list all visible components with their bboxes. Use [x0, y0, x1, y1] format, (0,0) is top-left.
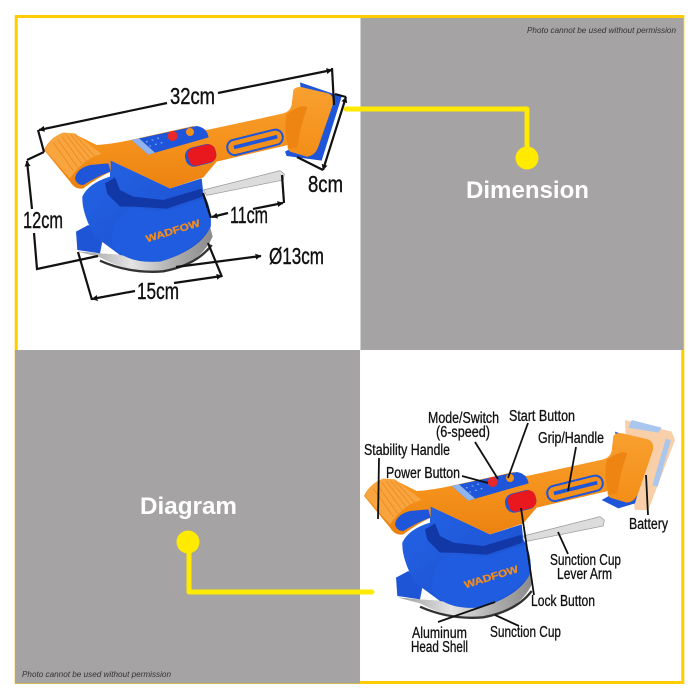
dimension: 8cm — [297, 94, 346, 197]
dimension: 32cm: 32cm — [170, 83, 215, 109]
body shaded detail — [425, 523, 523, 555]
label: Start Button — [508, 408, 575, 478]
heading: Diagram: Diagram — [140, 493, 237, 520]
handle slot — [546, 474, 604, 503]
body lobe — [432, 544, 531, 608]
label: Sunction Cup — [490, 615, 561, 641]
foot — [396, 571, 423, 599]
orange housing — [364, 433, 653, 535]
neck shading — [285, 106, 307, 149]
dimension: 11cm: 11cm — [230, 202, 268, 228]
dimension: 13cm diameter — [176, 243, 324, 269]
label: Sunction Cup Lever Arm: Sunction Cup — [550, 552, 621, 569]
panel light strip — [132, 138, 155, 155]
label: Aluminum Head Shell: Head Shell — [411, 639, 468, 656]
label: Battery — [629, 475, 668, 533]
dimension: 32cm — [38, 68, 334, 152]
label: Lock Button — [521, 508, 595, 610]
label: Power Button: Power Button — [386, 465, 460, 482]
start button — [506, 474, 514, 482]
lever arm — [203, 171, 284, 195]
label: Sunction Cup Lever Arm — [550, 532, 621, 583]
label: Mode/Switch — [428, 410, 499, 479]
dimension: 15cm — [78, 243, 222, 304]
dimension: 8cm: 8cm — [308, 171, 343, 197]
control panel — [452, 472, 529, 501]
suction cup base — [77, 227, 213, 272]
lock button — [503, 488, 538, 515]
body lobe — [112, 198, 211, 262]
label: Grip/Handle: Grip/Handle — [538, 430, 604, 447]
lock button — [183, 142, 218, 169]
label: Sunction Cup Lever Arm: Lever Arm — [557, 566, 612, 583]
heading: Dimension: Dimension — [466, 177, 589, 204]
handle slot — [226, 128, 284, 157]
body — [82, 160, 211, 262]
dimension: 12cm — [23, 152, 98, 269]
photo notice bottom: Photo cannot be used without permission — [22, 669, 171, 679]
label: Stability Handle — [364, 442, 450, 519]
connector: diagram — [176, 530, 372, 592]
indicator dots — [466, 484, 482, 492]
label: Mode/Switch: (6-speed) — [436, 424, 490, 441]
dimension: 15cm: 15cm — [137, 278, 179, 304]
panel light strip — [452, 484, 475, 501]
label: Grip/Handle — [538, 430, 604, 491]
stability grip — [45, 133, 102, 178]
label: Aluminum Head Shell: Aluminum — [412, 625, 467, 642]
tool illustration: dimension panel — [44, 82, 342, 272]
base rim — [100, 245, 212, 272]
label: Stability Handle: Stability Handle — [364, 442, 450, 459]
logo: WADFOW — [145, 218, 202, 245]
body shaded detail — [105, 177, 203, 209]
panel: diagram grey background — [15, 350, 360, 684]
label: Lock Button: Lock Button — [531, 593, 595, 610]
grip ribs — [53, 135, 95, 171]
panel: dimension grey background — [360, 18, 684, 350]
grip ribs — [373, 481, 415, 517]
tool illustration: diagram panel — [364, 420, 675, 618]
label: Start Button: Start Button — [509, 408, 575, 425]
neck shading — [605, 452, 627, 495]
dimension: 11cm — [203, 175, 284, 228]
battery — [625, 420, 675, 510]
start button — [186, 128, 194, 136]
grip slot — [395, 509, 431, 531]
label: Mode/Switch: Mode/Switch — [428, 410, 499, 427]
photo notice top: Photo cannot be used without permission — [527, 25, 676, 35]
power button — [168, 131, 178, 141]
control panel — [132, 126, 209, 155]
dimension: 12cm: 12cm — [23, 207, 63, 233]
label: Sunction Cup: Sunction Cup — [490, 624, 561, 641]
lever arm — [523, 517, 604, 541]
battery mount plate — [602, 432, 652, 508]
suction cup base — [397, 573, 533, 618]
base rim — [420, 591, 532, 618]
logo: WADFOW — [463, 564, 520, 591]
body — [402, 506, 531, 608]
stability grip — [365, 479, 422, 524]
battery mount plate — [285, 82, 342, 161]
power button — [488, 477, 498, 487]
grip slot — [75, 163, 111, 185]
connector: dimension — [346, 109, 538, 170]
label: Aluminum Head Shell — [411, 602, 495, 656]
indicator dots — [146, 138, 162, 146]
label: Battery: Battery — [629, 516, 668, 533]
dimension: 13cm diameter: Ø13cm — [269, 243, 324, 269]
orange housing — [44, 87, 333, 189]
foot — [76, 225, 103, 253]
